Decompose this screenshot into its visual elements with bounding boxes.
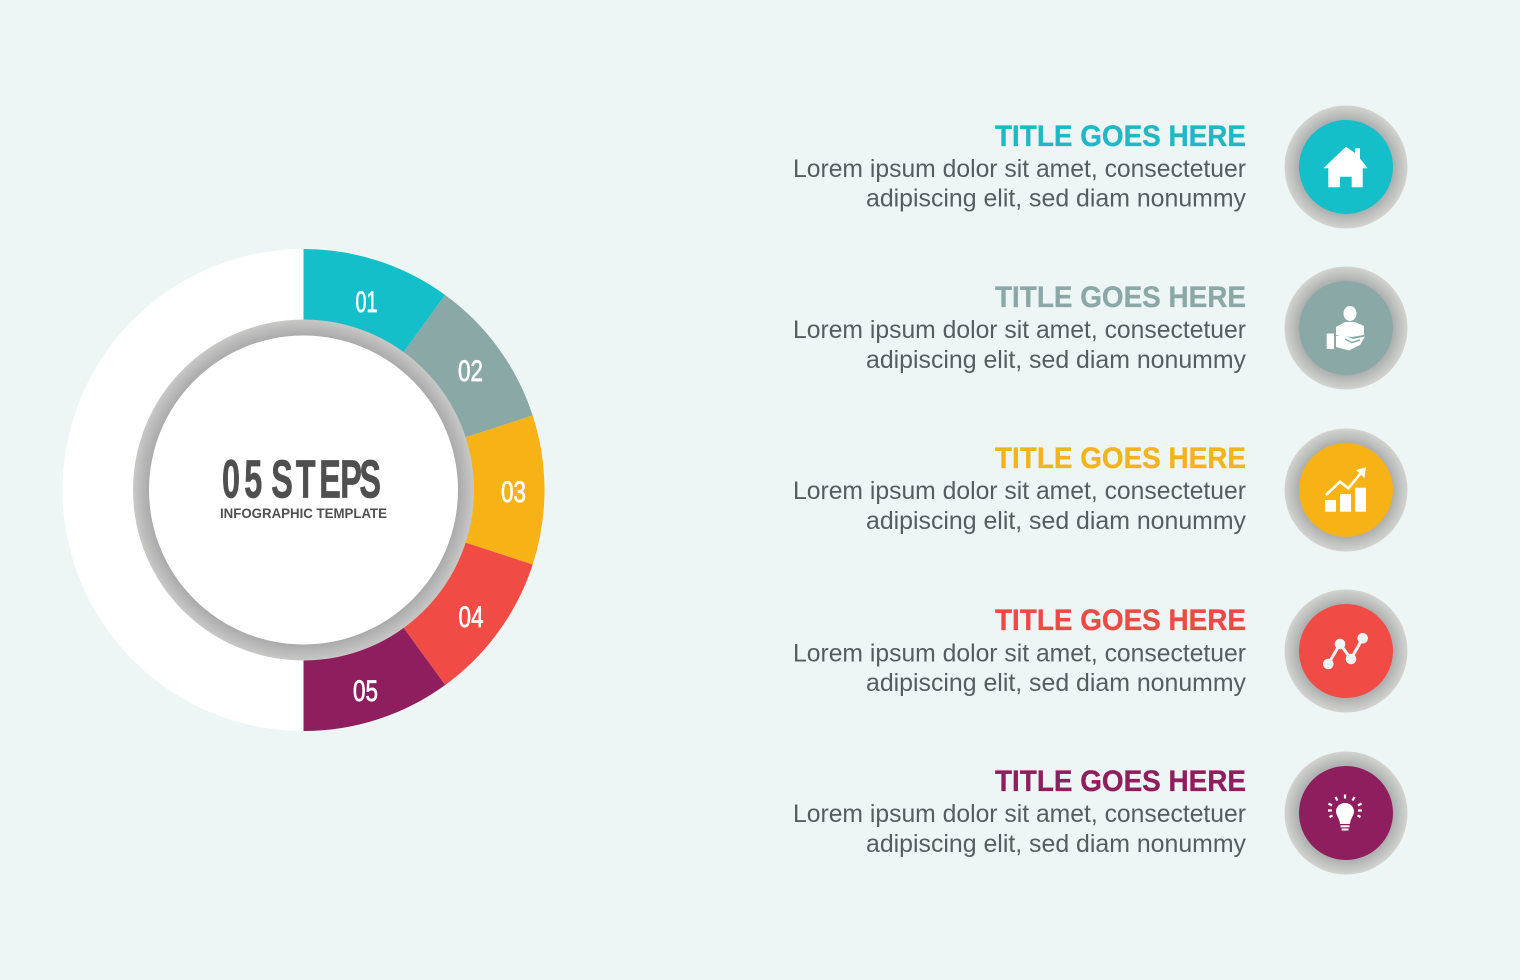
panel: donut chart — [62, 249, 545, 731]
segment 03 — [456, 416, 545, 564]
segment 01 — [304, 249, 445, 361]
segment 05 — [304, 619, 445, 731]
step 3 icon: rising bar chart — [1284, 428, 1408, 552]
step 4 text block: TITLE GOES HERE — [995, 604, 1246, 637]
segment 02 — [398, 295, 533, 441]
white centre circle — [149, 336, 458, 644]
step 3 text block: adipiscing elit, sed diam nonummy — [866, 507, 1246, 535]
segment number 03: 03 — [501, 476, 526, 509]
step 4 icon: connected line graph — [1284, 590, 1408, 712]
step 1 text block — [793, 120, 1246, 212]
step 2 text block: TITLE GOES HERE — [995, 281, 1246, 314]
step 4 text block — [793, 604, 1246, 697]
step 1 text block: TITLE GOES HERE — [995, 120, 1246, 153]
segment number 05: 05 — [353, 675, 378, 708]
step 5 text block: adipiscing elit, sed diam nonummy — [866, 830, 1246, 858]
step 2 icon: person on hand — [1284, 266, 1408, 390]
step 5 text block: Lorem ipsum dolor sit amet, consectetuer — [793, 800, 1246, 828]
step 1 text block: adipiscing elit, sed diam nonummy — [866, 184, 1246, 212]
step 4 text block: adipiscing elit, sed diam nonummy — [866, 669, 1246, 697]
step 3 text block: Lorem ipsum dolor sit amet, consectetuer — [793, 477, 1246, 505]
step 3 text block: TITLE GOES HERE — [995, 442, 1246, 475]
step 1 icon: house — [1284, 106, 1408, 228]
segment 04 — [398, 539, 533, 685]
step 3 text block — [793, 442, 1246, 535]
step 2 text block: adipiscing elit, sed diam nonummy — [866, 346, 1246, 374]
segment number 02: 02 — [458, 355, 483, 388]
segment number 04: 04 — [458, 601, 484, 634]
step 5 text block — [793, 765, 1246, 858]
centre subheading: INFOGRAPHIC TEMPLATE — [220, 505, 387, 521]
step 4 text block: Lorem ipsum dolor sit amet, consectetuer — [793, 640, 1246, 668]
step 2 text block — [793, 281, 1246, 374]
centre heading: 05 steps: 05 STEPS — [222, 450, 381, 510]
step 5 icon: light bulb — [1284, 752, 1408, 874]
grey inner ring — [133, 320, 474, 660]
step 1 text block: Lorem ipsum dolor sit amet, consectetuer — [793, 155, 1246, 183]
white donut base — [62, 249, 544, 731]
step 2 text block: Lorem ipsum dolor sit amet, consectetuer — [793, 316, 1246, 344]
step 5 text block: TITLE GOES HERE — [995, 765, 1246, 798]
segment number 01: 01 — [356, 286, 378, 319]
